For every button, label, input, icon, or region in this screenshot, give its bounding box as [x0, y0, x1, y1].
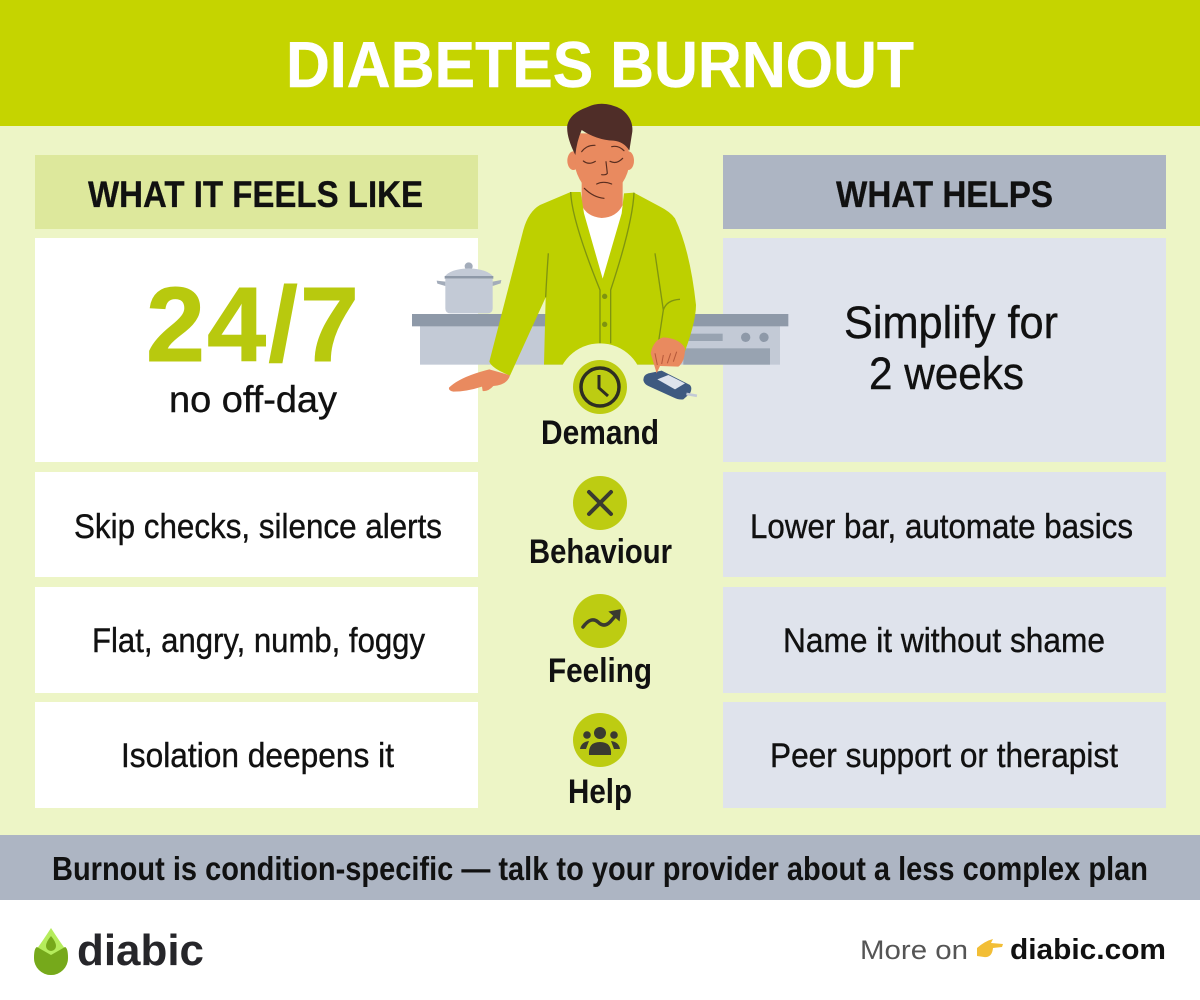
icon: cross — [573, 476, 627, 530]
illustration: person at kitchen counter — [412, 104, 788, 430]
hair — [567, 104, 632, 155]
card: peer support — [723, 702, 1166, 808]
icon: pointing hand — [977, 939, 1003, 957]
card: simplify for 2 weeks: Simplify for — [844, 297, 1058, 348]
card: name it — [723, 587, 1166, 693]
icon: clock — [573, 360, 627, 414]
card: skip checks: Skip checks, silence alerts — [74, 508, 442, 546]
title banner — [0, 0, 1200, 126]
card: 24/7 no off-day — [35, 238, 478, 462]
kitchen counter — [412, 314, 788, 365]
label: demand: Demand — [541, 414, 659, 452]
neck — [582, 180, 623, 218]
panel: what helps — [723, 155, 1166, 808]
label: behaviour: Behaviour — [529, 533, 672, 571]
left hand — [449, 369, 510, 392]
footer callout band — [0, 835, 1200, 900]
right hand — [651, 337, 685, 373]
card: flat angry numb foggy: Flat, angry, numb, foggy — [92, 622, 425, 660]
t-shirt — [578, 203, 628, 282]
card: simplify for 2 weeks: 2 weeks — [869, 348, 1024, 399]
cardigan — [489, 192, 696, 376]
face — [567, 151, 579, 170]
heading: what it feels like — [35, 155, 478, 229]
website: diabic.com — [1010, 934, 1166, 966]
card: 24/7 no off-day: 24/7 — [146, 266, 359, 384]
card: lower bar: Lower bar, automate basics — [750, 508, 1133, 546]
card: 24/7 no off-day: no off-day — [169, 379, 338, 420]
icon: trend arrow — [573, 594, 627, 648]
card: flat angry numb foggy — [35, 587, 478, 693]
more on text: More on — [860, 935, 968, 965]
heading: what helps: WHAT HELPS — [836, 174, 1053, 215]
card: peer support: Peer support or therapist — [770, 737, 1119, 775]
card: isolation — [35, 702, 478, 808]
card: simplify for 2 weeks — [723, 238, 1166, 462]
title: DIABETES BURNOUT — [286, 28, 914, 101]
panel: what it feels like — [35, 155, 478, 808]
label: feeling: Feeling — [548, 652, 652, 690]
heading: what helps — [723, 155, 1166, 229]
brand strip — [0, 900, 1200, 1000]
facial features — [582, 145, 624, 198]
heading: what it feels like: WHAT IT FEELS LIKE — [88, 174, 423, 215]
brand name: diabic — [77, 926, 204, 975]
icon: group of people — [573, 713, 627, 767]
icon: cooking pot — [437, 262, 501, 313]
label: help: Help — [568, 773, 632, 811]
card: name it: Name it without shame — [783, 622, 1105, 660]
center notch — [557, 343, 643, 430]
card: isolation: Isolation deepens it — [121, 737, 395, 775]
card: skip checks — [35, 472, 478, 577]
card: lower bar — [723, 472, 1166, 577]
icon: glucose meter — [643, 371, 697, 399]
center column labels — [529, 360, 672, 811]
person — [489, 104, 696, 376]
icon: diabic drop logo — [34, 928, 68, 975]
